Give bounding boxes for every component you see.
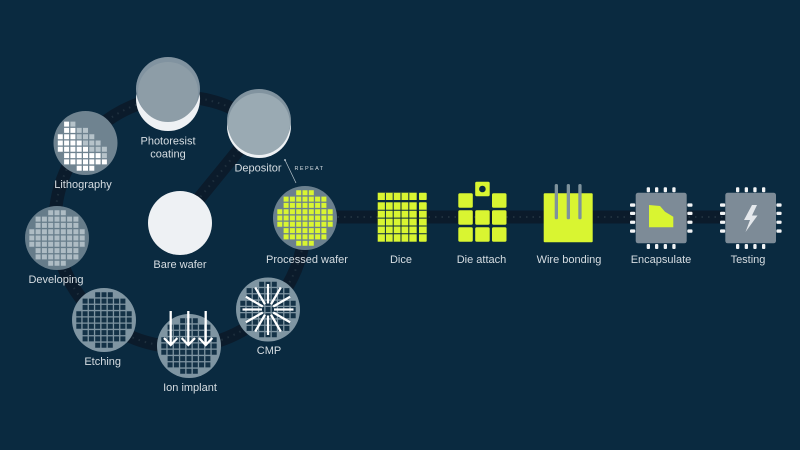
- step: developing: [25, 206, 89, 286]
- ion arrows: [164, 311, 212, 345]
- step: CMP: CMP: [257, 345, 281, 357]
- step: photoresist coating: [136, 57, 200, 160]
- step: processed wafer: [266, 186, 348, 266]
- step: encapsulate: Encapsulate: [631, 254, 691, 266]
- step: testing: Testing: [731, 254, 765, 266]
- encapsulated die: [649, 205, 673, 227]
- step: dice: Dice: [390, 254, 412, 266]
- chip pins: [630, 187, 692, 249]
- step: photoresist coating: coating: [150, 148, 186, 160]
- repeat annotation: [284, 159, 324, 183]
- step: die attach: Die attach: [457, 254, 506, 266]
- step: die attach: [457, 182, 506, 266]
- step: depositor: [227, 89, 291, 174]
- step: encapsulate: [630, 187, 692, 266]
- step: ion implant: [157, 311, 221, 394]
- step: photoresist coating: Photoresist: [140, 136, 196, 148]
- step: dice: [378, 193, 427, 266]
- chip pins: [720, 187, 782, 249]
- lithography exposed cells: [58, 124, 107, 168]
- step: etching: [72, 288, 136, 368]
- step: CMP: [236, 278, 300, 357]
- attached die: [475, 182, 490, 196]
- step: processed wafer: Processed wafer: [266, 254, 348, 266]
- CMP starburst: [242, 284, 294, 335]
- step: lithography: Lithography: [54, 179, 112, 191]
- step: developing: Developing: [28, 274, 84, 286]
- step: wire bonding: Wire bonding: [537, 254, 601, 266]
- lightning bolt: [744, 205, 758, 232]
- step: wire bonding: [537, 184, 601, 266]
- process track: [55, 97, 750, 347]
- step: etching: Etching: [84, 356, 121, 368]
- step: depositor: Depositor: [234, 162, 282, 174]
- repeat annotation: REPEAT: [294, 166, 324, 172]
- step: testing: [720, 187, 782, 266]
- bond wires: [555, 184, 582, 219]
- step: bare wafer: [148, 191, 212, 271]
- step: lithography: [54, 111, 118, 191]
- step: ion implant: Ion implant: [163, 382, 217, 394]
- step: bare wafer: Bare wafer: [153, 259, 207, 271]
